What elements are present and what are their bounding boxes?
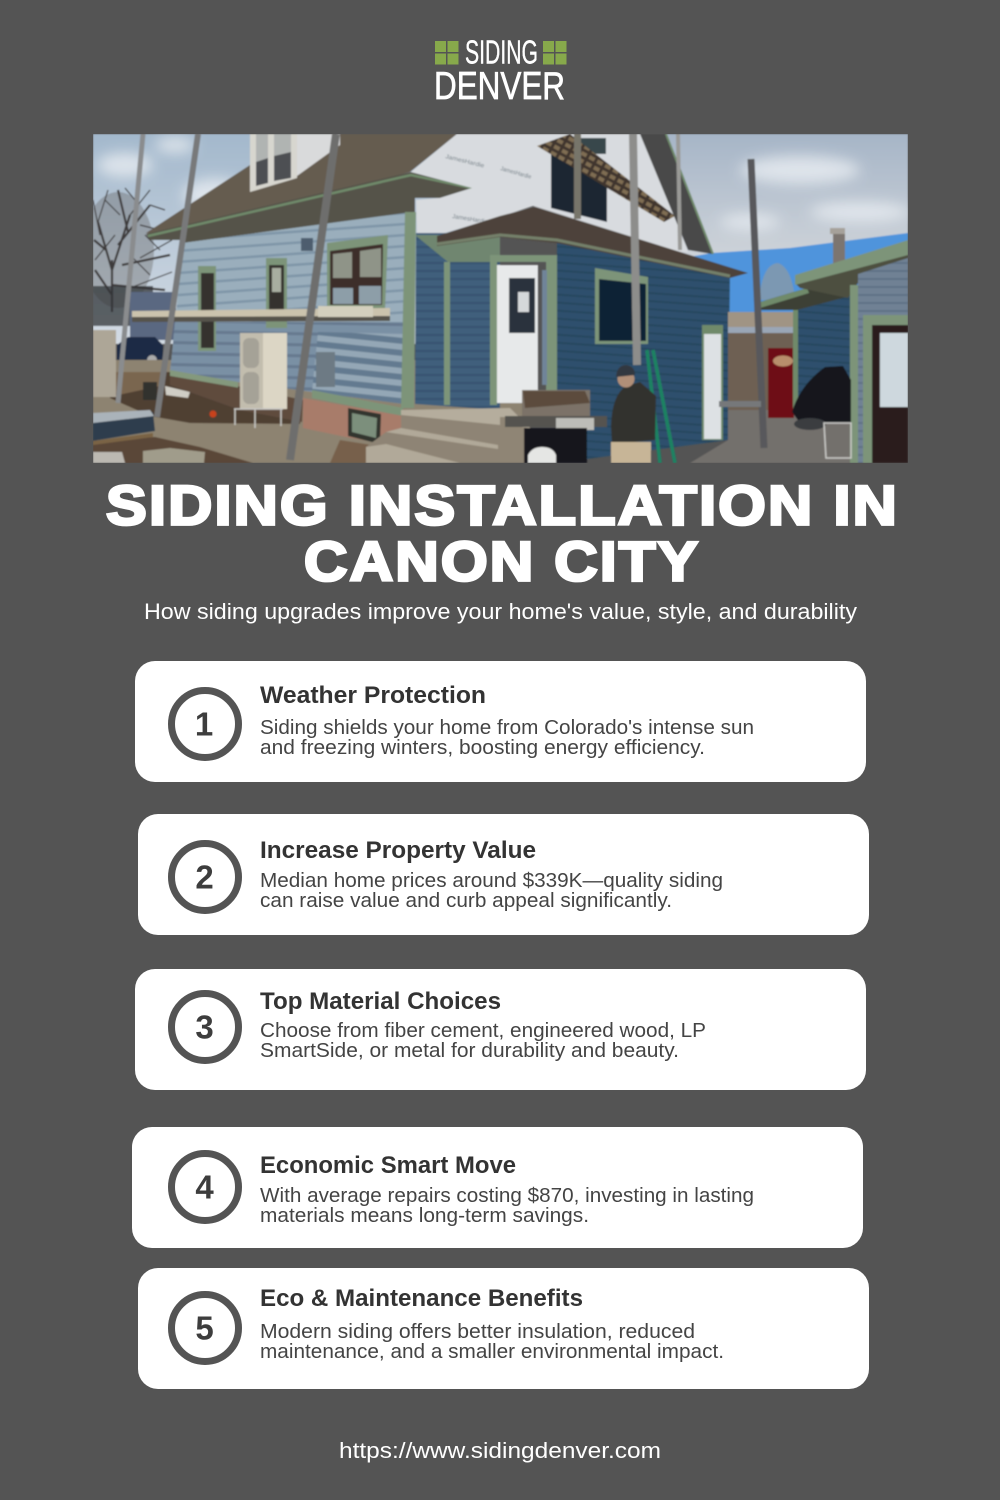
number badge 2	[172, 844, 238, 910]
main roof	[146, 134, 457, 238]
green corner trim	[401, 212, 416, 408]
small side door	[702, 325, 723, 440]
description	[260, 717, 754, 759]
number badge 1	[172, 690, 238, 758]
electrical box	[316, 352, 335, 387]
light blue siding wall	[176, 212, 406, 323]
photo: house with siding installation in progress: JamesHardie	[499, 166, 532, 181]
garage	[793, 300, 799, 410]
logo: Siding Denver	[434, 34, 566, 108]
dormer	[250, 134, 297, 192]
house wrap upper wall	[411, 134, 688, 252]
icon: left green window squares	[435, 41, 458, 64]
heading: Increase Property Value	[260, 837, 536, 864]
covered grill	[792, 366, 851, 423]
rubble	[93, 452, 125, 463]
description: SmartSide, or metal for durability and beauty.	[260, 1040, 679, 1062]
photo: house with siding installation in progress: JamesHardie	[452, 214, 489, 226]
barbecue grill	[522, 390, 590, 416]
description: Modern siding offers better insulation, reduced	[260, 1321, 695, 1343]
logo word: DENVER: DENVER	[434, 65, 565, 108]
scaffold poles	[118, 134, 764, 460]
bare tree	[93, 192, 154, 308]
panel: 1 Weather Protection	[135, 661, 866, 782]
gable edge roof	[640, 134, 712, 254]
description	[260, 1020, 706, 1062]
man in jacket	[611, 365, 656, 463]
heat pump	[262, 332, 288, 410]
description: Siding shields your home from Colorado's intense sun	[260, 717, 754, 739]
panel: 2 Increase Property Value	[138, 814, 869, 935]
description	[260, 1185, 754, 1227]
description: maintenance, and a smaller environmental impact.	[260, 1341, 724, 1363]
icon: right green window squares	[543, 41, 566, 64]
title: CANON CITY	[304, 530, 700, 592]
porch roof	[437, 207, 748, 278]
subtitle: How siding upgrades improve your home's value, style, and durability	[144, 599, 857, 624]
beige box and stacked material	[93, 330, 116, 397]
upper window and scaffold plank	[551, 150, 607, 222]
heading: Top Material Choices	[260, 988, 501, 1015]
number badge 1: 1	[195, 706, 213, 742]
distant building and car	[130, 292, 176, 340]
heading: Eco & Maintenance Benefits	[260, 1285, 583, 1312]
photo: house with siding installation in progress	[82, 134, 910, 463]
green porch frame	[497, 254, 558, 391]
wall windows	[198, 235, 388, 351]
white door	[497, 265, 538, 403]
number badge 3	[172, 994, 238, 1060]
description: With average repairs costing $870, investing in lasting	[260, 1185, 754, 1207]
soffit	[146, 172, 472, 243]
right patio	[690, 408, 860, 463]
sky	[93, 134, 493, 344]
description: materials means long-term savings.	[260, 1205, 589, 1227]
number badge 5	[172, 1294, 238, 1362]
red cabinet	[768, 348, 794, 418]
panel: 4 Economic Smart Move	[132, 1127, 863, 1248]
distant trees and building	[760, 263, 795, 300]
heading: Economic Smart Move	[260, 1152, 516, 1179]
number badge 4: 4	[195, 1168, 214, 1206]
number badge 5: 5	[195, 1310, 214, 1346]
panel: 3 Top Material Choices	[135, 969, 866, 1090]
description: Median home prices around $339K—quality siding	[260, 870, 723, 892]
panel: 5 Eco and Maintenance Benefits	[138, 1268, 869, 1389]
website URL: https://www.sidingdenver.com	[339, 1438, 661, 1463]
description	[260, 1321, 724, 1363]
concrete steps	[366, 408, 530, 463]
number badge 4	[172, 1154, 238, 1220]
description: and freezing winters, boosting energy efficiency.	[260, 737, 705, 759]
number badge 3: 3	[195, 1008, 214, 1046]
red marker	[210, 410, 216, 418]
logo word: SIDING: SIDING	[465, 34, 538, 70]
garage wall	[858, 258, 908, 463]
siding ladder	[132, 308, 390, 320]
title: SIDING INSTALLATION IN	[106, 474, 899, 536]
dark blue wall	[415, 233, 500, 410]
photo: house with siding installation in progress: JamesHardie	[445, 154, 485, 170]
description: can raise value and curb appeal significantly.	[260, 890, 672, 912]
chimney	[833, 232, 845, 264]
blue wall window	[595, 268, 648, 344]
brick foundation	[170, 376, 303, 422]
ground	[93, 360, 523, 463]
green base trim	[170, 370, 238, 388]
description	[260, 870, 723, 912]
title	[106, 474, 899, 592]
green ladder	[647, 350, 675, 463]
propane tank	[528, 447, 556, 463]
number badge 2: 2	[195, 858, 214, 896]
heading: Weather Protection	[260, 682, 486, 709]
description: Choose from fiber cement, engineered wood, LP	[260, 1020, 706, 1042]
